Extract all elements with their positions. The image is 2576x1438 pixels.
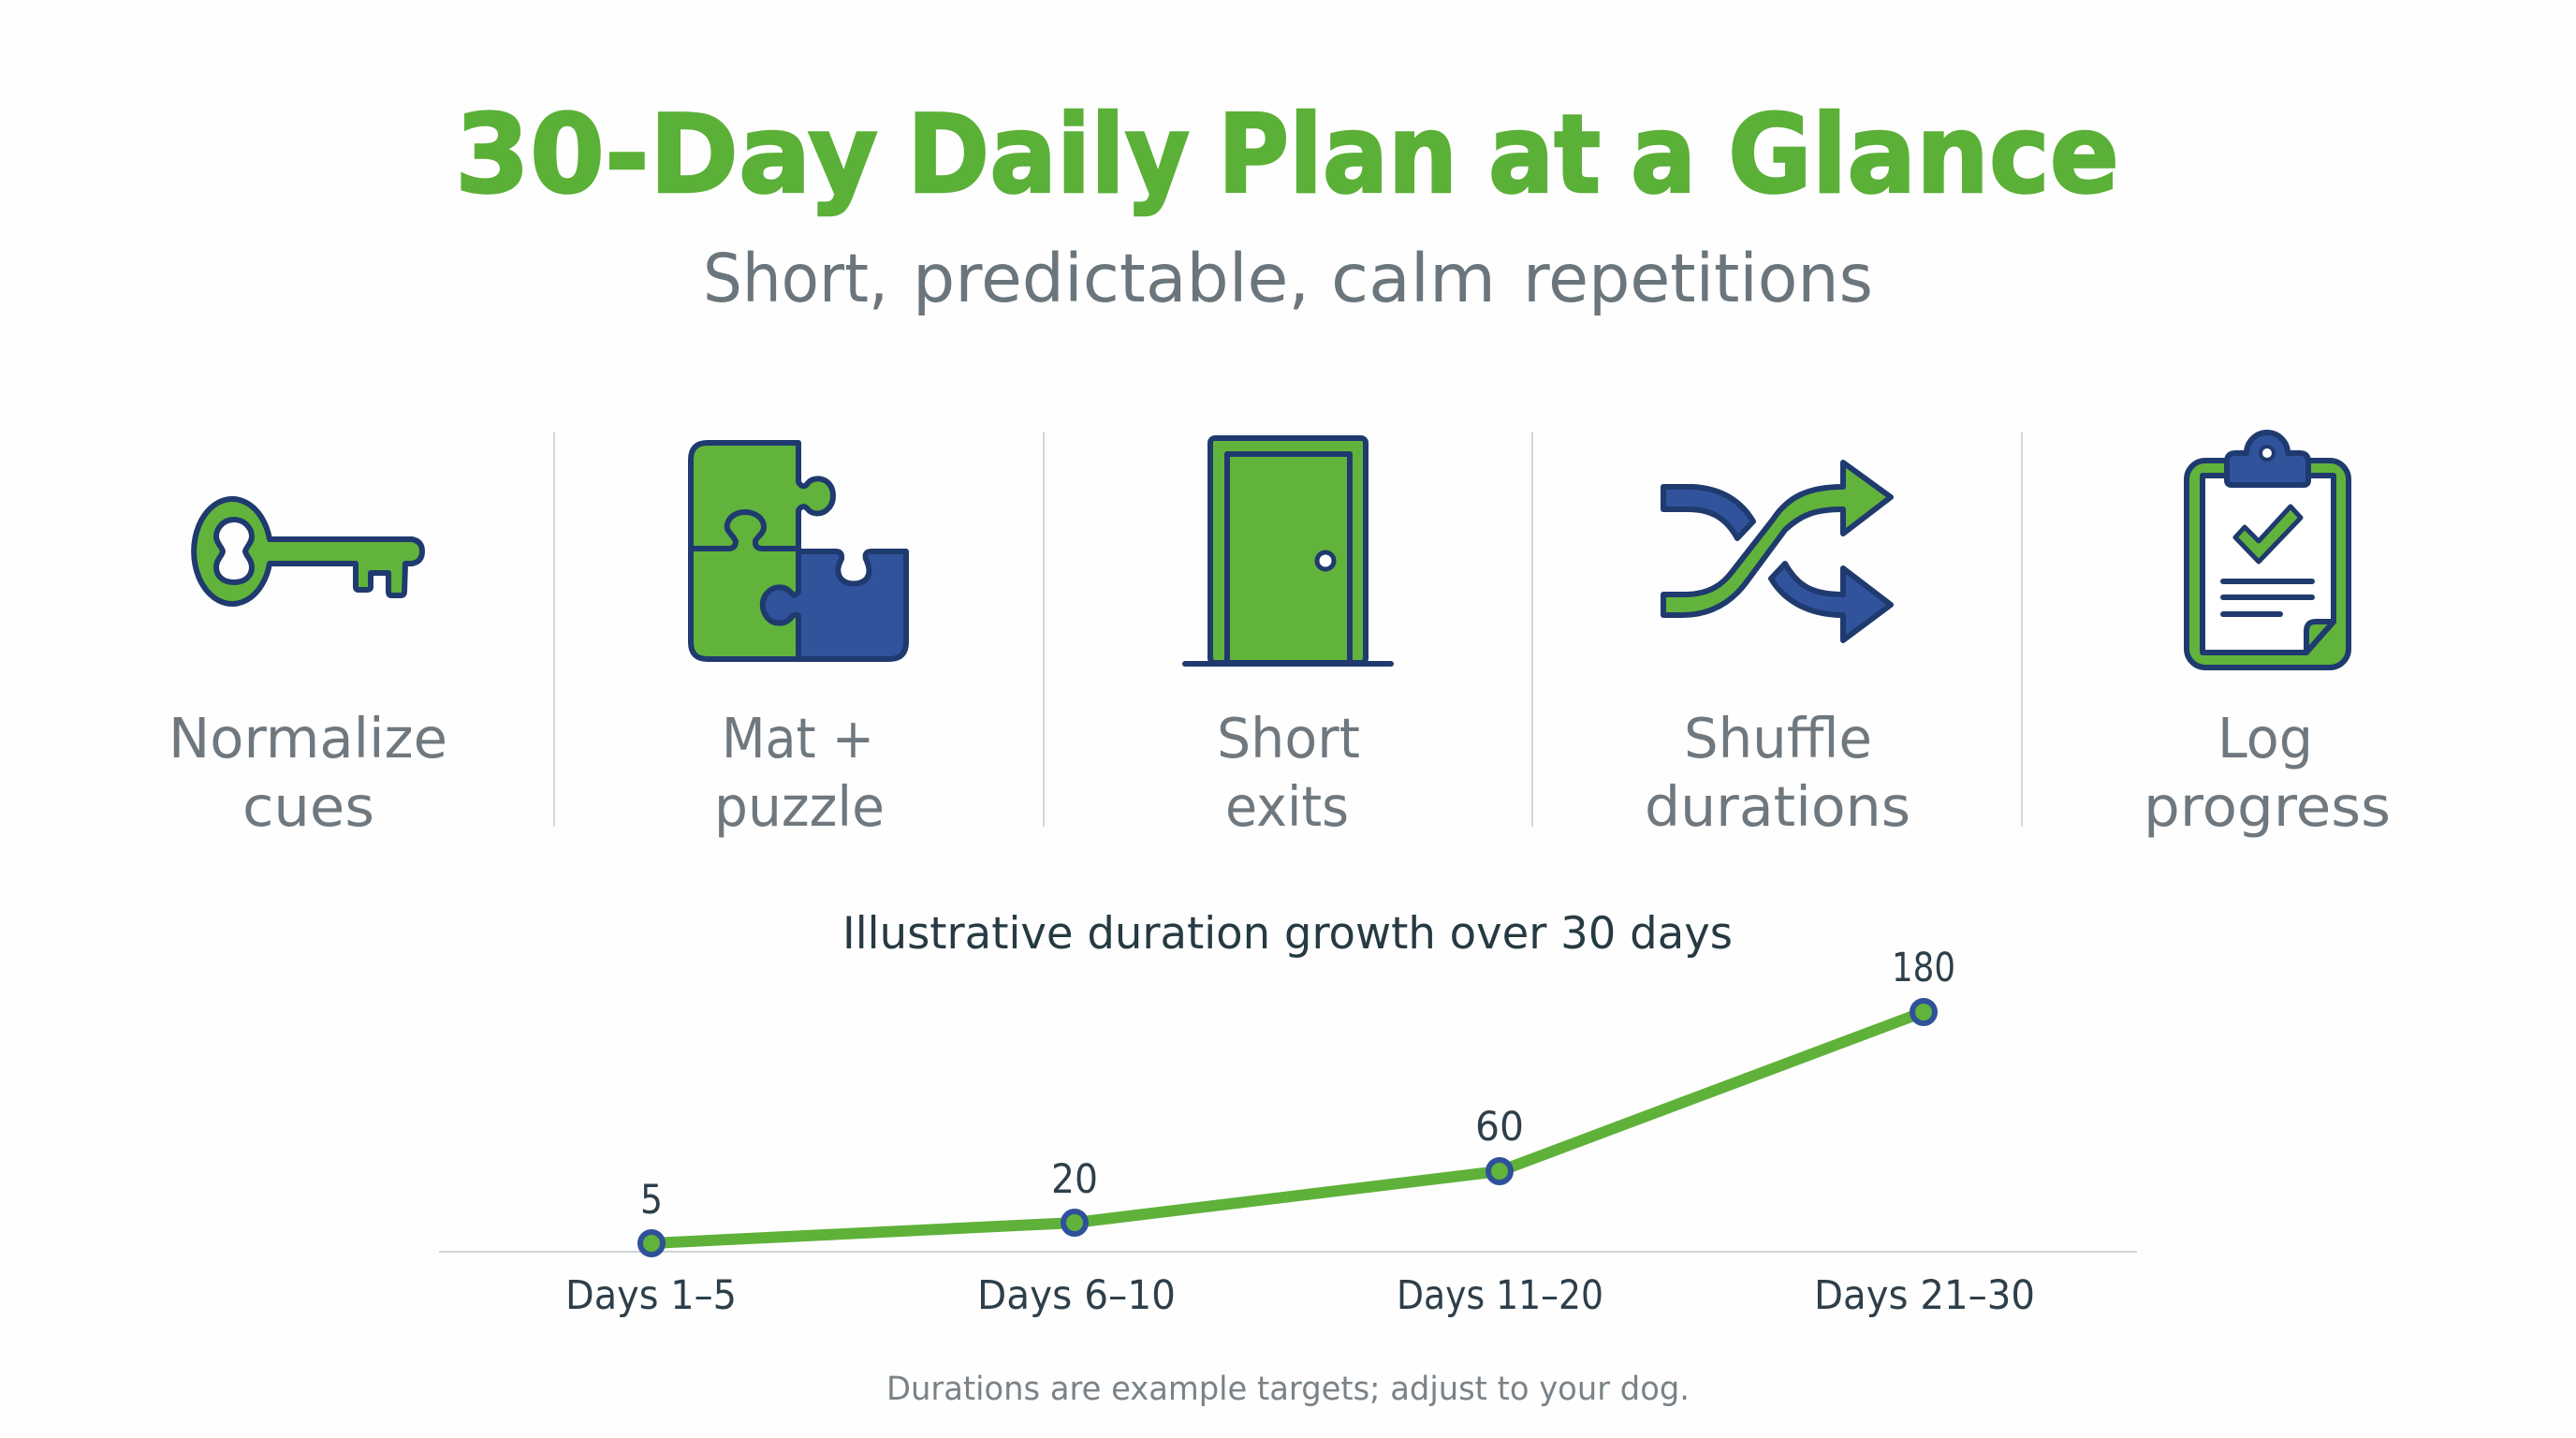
label: shuffle durations: durations bbox=[1645, 774, 1910, 839]
label: short exits: Short bbox=[1217, 706, 1360, 770]
icon: puzzle bbox=[691, 443, 906, 659]
value labels bbox=[640, 945, 1955, 1224]
label: log progress: Log bbox=[2217, 706, 2313, 770]
title: a bbox=[1631, 92, 1696, 218]
label: mat + puzzle: puzzle bbox=[714, 774, 885, 839]
value labels: 20 bbox=[1051, 1156, 1098, 1203]
chart: duration growth bbox=[439, 908, 2137, 1319]
label: short exits bbox=[1217, 706, 1360, 839]
value labels: 180 bbox=[1892, 945, 1955, 991]
axis labels: Days 1–5 bbox=[565, 1272, 737, 1319]
title bbox=[455, 92, 2119, 218]
label: log progress: progress bbox=[2144, 774, 2391, 839]
axis labels: Days 11–20 bbox=[1397, 1272, 1603, 1319]
label: normalize cues bbox=[168, 706, 447, 839]
data points bbox=[640, 1001, 1935, 1255]
subtitle: repetitions bbox=[1523, 240, 1873, 317]
label: log progress bbox=[2144, 706, 2391, 839]
label: normalize cues: Normalize bbox=[168, 706, 447, 770]
label: shuffle durations bbox=[1645, 706, 1910, 839]
title: Glance bbox=[1728, 92, 2119, 218]
title: Daily bbox=[907, 92, 1190, 218]
step: log progress bbox=[2144, 433, 2391, 839]
subtitle: Short, bbox=[703, 240, 888, 317]
icon: door bbox=[1185, 438, 1391, 664]
step: mat + puzzle bbox=[691, 443, 906, 839]
subtitle: calm bbox=[1331, 240, 1496, 317]
label: short exits: exits bbox=[1225, 774, 1349, 839]
label: mat + puzzle bbox=[714, 706, 885, 839]
label: shuffle durations: Shuffle bbox=[1684, 706, 1872, 770]
title: at bbox=[1488, 92, 1601, 218]
value labels: 5 bbox=[640, 1177, 663, 1224]
footnote: Durations are example targets; adjust to your dog. bbox=[886, 1371, 1690, 1408]
step: shuffle durations bbox=[1645, 462, 1910, 839]
chart title: Illustrative duration growth over 30 days bbox=[842, 908, 1733, 960]
step: short exits bbox=[1185, 438, 1391, 839]
axis labels: Days 21–30 bbox=[1814, 1272, 2035, 1319]
title: Plan bbox=[1218, 92, 1457, 218]
subtitle bbox=[703, 240, 1873, 317]
icon: shuffle arrows bbox=[1663, 462, 1891, 640]
axis labels: Days 6–10 bbox=[977, 1272, 1176, 1319]
label: mat + puzzle: Mat + bbox=[722, 706, 874, 770]
value labels: 60 bbox=[1475, 1104, 1524, 1151]
label: normalize cues: cues bbox=[242, 774, 374, 839]
axis labels bbox=[565, 1272, 2035, 1319]
title: 30-Day bbox=[455, 92, 878, 218]
subtitle: predictable, bbox=[913, 240, 1310, 317]
icon: key bbox=[194, 499, 422, 604]
line series bbox=[651, 1012, 1924, 1243]
step: normalize cues bbox=[168, 499, 447, 839]
icon: clipboard bbox=[2187, 433, 2349, 668]
